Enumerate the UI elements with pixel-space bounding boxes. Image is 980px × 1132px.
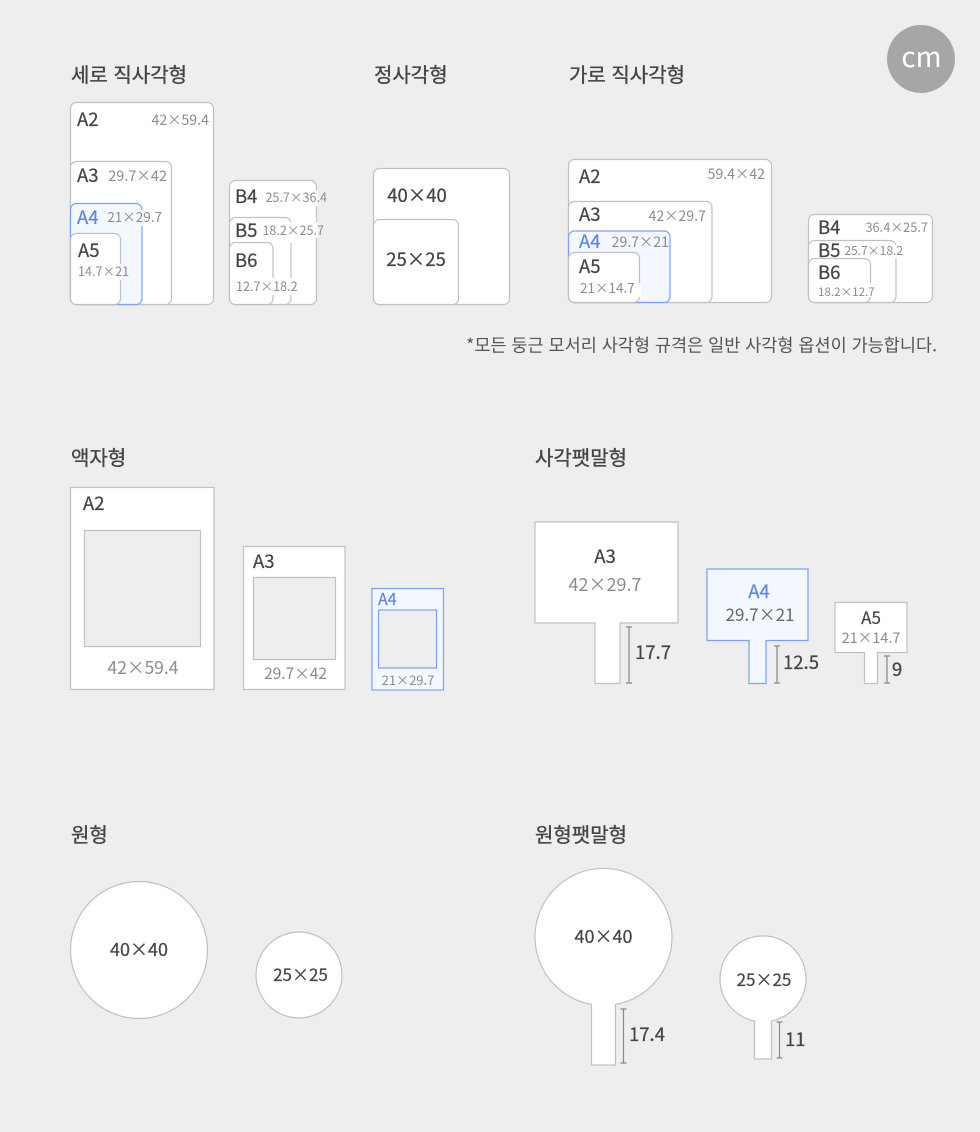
panel: portrait A series: A3: [77, 162, 99, 188]
frame A2: [70, 488, 214, 690]
heading: portrait rectangle: 세로 직사각형: [71, 59, 187, 88]
panel: landscape A series: 42×29.7: [648, 206, 706, 226]
panel: portrait B series: 18.2×25.7: [262, 220, 324, 239]
unit badge: cm: cm: [901, 36, 942, 76]
note: rounded corner option: *모든 둥근 모서리 사각형 규격은 일반 사각형 옵션이 가능합니다.: [466, 332, 937, 358]
heading: square: 정사각형: [374, 59, 448, 88]
circle paddle 40x40: 17.4: [629, 1021, 665, 1047]
paddle A3: A3: [594, 543, 616, 569]
circle 40x40: 40×40: [110, 936, 168, 962]
panel: landscape A series: 59.4×42: [707, 164, 765, 184]
panel: portrait B series: B4: [235, 183, 257, 209]
circle paddle 40x40: [535, 868, 672, 1065]
frame A4: [372, 586, 444, 690]
panel: portrait B series: 12.7×18.2: [236, 276, 298, 295]
panel: portrait A series: [70, 102, 214, 304]
circle 25x25: 25×25: [273, 961, 328, 986]
panel: portrait A series: A5: [78, 237, 100, 263]
panel: portrait B series: B5: [235, 217, 257, 243]
panel: portrait A series: A4: [77, 204, 99, 230]
panel: landscape B series: 36.4×25.7: [865, 217, 928, 236]
panel: square sizes: 40×40: [387, 182, 447, 208]
panel: landscape A series: 21×14.7: [580, 277, 635, 297]
panel: landscape A series: [568, 160, 772, 302]
frame A4: 21×29.7: [382, 670, 434, 689]
frame A2: 42×59.4: [108, 655, 179, 680]
paddle A3: 17.7: [635, 639, 671, 665]
panel: portrait A series: A2: [77, 106, 99, 132]
frame A3: A3: [253, 548, 275, 574]
circle paddle 25x25: 25×25: [737, 966, 791, 991]
circle paddle 25x25: 11: [785, 1026, 806, 1052]
paddle A5: [835, 602, 907, 684]
panel: landscape A series: A2: [579, 163, 601, 189]
panel: landscape A series: 29.7×21: [611, 232, 669, 252]
paddle A4: A4: [748, 578, 770, 604]
paddle A3: [535, 522, 678, 684]
heading: circle: 원형: [71, 819, 108, 848]
paddle A4: [707, 569, 819, 684]
panel: landscape B series: 25.7×18.2: [844, 242, 903, 259]
circle 25x25: [256, 932, 342, 1018]
panel: portrait A series: 42×59.4: [151, 110, 209, 130]
heading: circle paddle: 원형팻말형: [535, 819, 627, 848]
heading: landscape rectangle: 가로 직사각형: [569, 59, 685, 88]
panel: landscape A series: A4: [579, 228, 601, 254]
panel: landscape A series: A3: [579, 201, 601, 227]
panel: landscape A series: A5: [579, 253, 601, 279]
panel: square sizes: 25×25: [386, 246, 446, 272]
panel: landscape B series: 18.2×12.7: [818, 284, 875, 300]
circle 40x40: [70, 882, 208, 1018]
panel: portrait B series: [230, 180, 327, 304]
panel: portrait B series: 25.7×36.4: [265, 187, 327, 206]
heading: rectangle paddle: 사각팻말형: [535, 442, 627, 471]
panel: portrait A series: 14.7×21: [78, 261, 129, 280]
panel: landscape B series: B5: [818, 237, 840, 263]
panel: square sizes: [374, 168, 510, 304]
frame A3: 29.7×42: [264, 662, 327, 684]
paddle A3: 42×29.7: [569, 571, 641, 597]
paddle A5: A5: [861, 604, 881, 629]
panel: portrait B series: B6: [235, 247, 257, 273]
frame A3: [244, 546, 345, 690]
heading: frame type: 액자형: [71, 442, 126, 471]
frame A4: A4: [378, 586, 397, 610]
panel: landscape B series: [808, 214, 932, 302]
circle paddle 25x25: [720, 936, 806, 1059]
unit badge: cm: [887, 25, 955, 93]
panel: landscape B series: B6: [818, 259, 840, 285]
circle paddle 40x40: 40×40: [575, 923, 632, 949]
paddle A4: 29.7×21: [726, 601, 794, 626]
panel: portrait A series: 29.7×42: [108, 165, 167, 186]
frame A2: A2: [83, 490, 105, 516]
paddle A4: 12.5: [783, 649, 819, 675]
paddle A5: 21×14.7: [842, 627, 900, 648]
panel: landscape B series: B4: [818, 214, 840, 240]
paddle A5: 9: [892, 656, 902, 682]
panel: portrait A series: 21×29.7: [107, 206, 162, 226]
